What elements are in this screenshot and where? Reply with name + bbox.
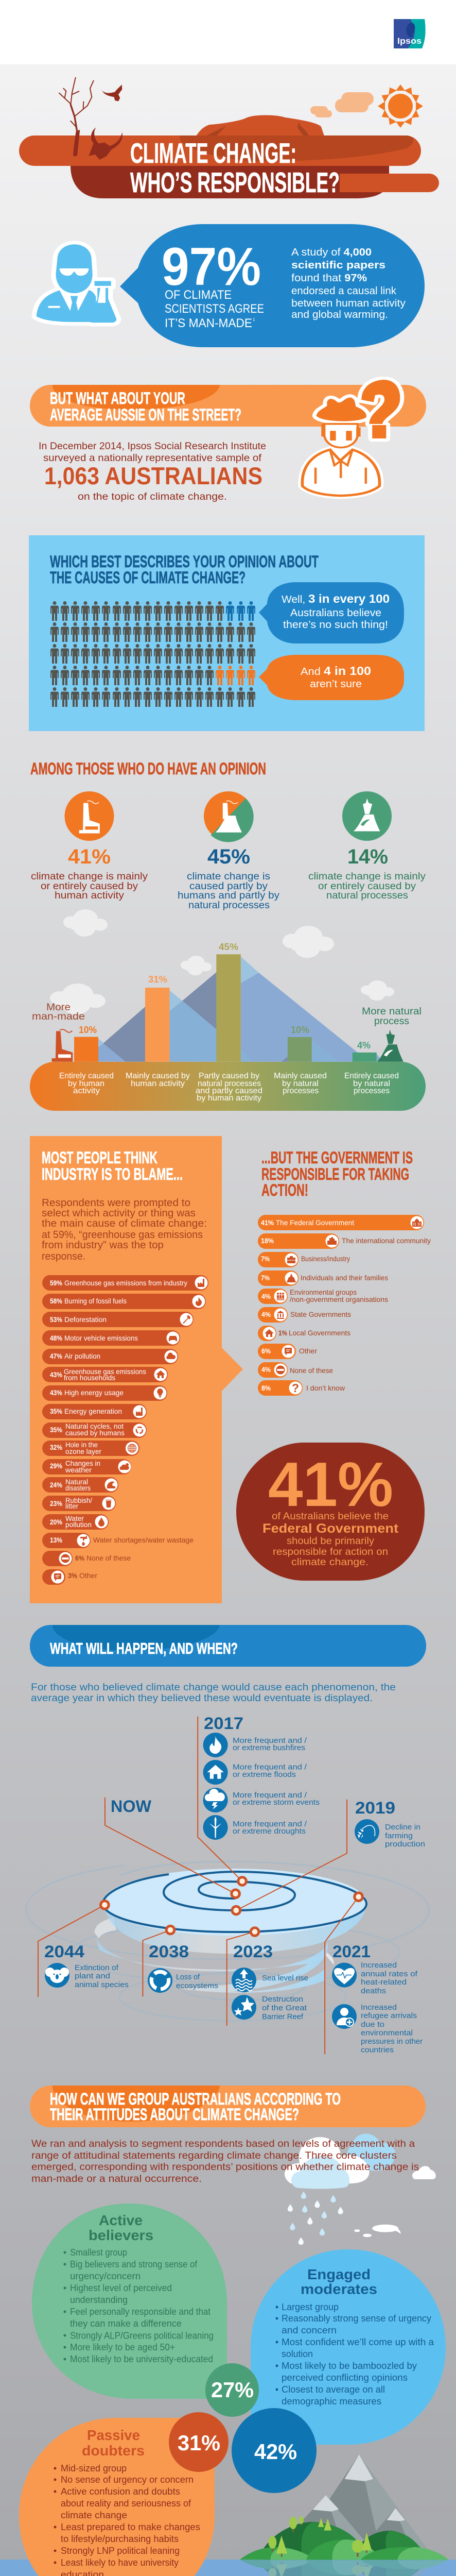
bar list: causes: disasters (65, 1484, 91, 1492)
bar list: who should act: 4% (261, 1310, 271, 1318)
timeline text: or extreme storm events (233, 1798, 320, 1807)
axis band: human activity (131, 1079, 185, 1088)
panel: active believers: Feel personally responsible and that (70, 2307, 211, 2317)
stat: 14% natural processes: climate change is mainly (308, 871, 426, 882)
bar list: who should act: 7% (261, 1255, 270, 1263)
bar list: causes: Motor vehicle emissions (64, 1334, 138, 1342)
bar list: who should act: 1% (278, 1329, 287, 1337)
year labels: NOW (111, 1797, 152, 1816)
panel: passive doubters: about reality and seriousness of (61, 2498, 191, 2509)
stat: 14% natural processes: natural processes (326, 890, 408, 901)
year labels: 2044 (44, 1942, 84, 1961)
body text: the main cause of climate change: (42, 1218, 207, 1229)
bar list: who should act (258, 1215, 431, 1396)
bar list: causes: Natural (65, 1478, 88, 1486)
timeline text: ecosystems (176, 1981, 218, 1990)
bar list: causes: 43% (50, 1370, 62, 1379)
stat: 14% natural processes (308, 791, 426, 901)
heading bar: WHAT WILL HAPPEN, AND WHEN? (50, 1639, 238, 1657)
panel: passive doubters (19, 2418, 215, 2576)
stat: 45% partly human partly natural: climate change is (187, 871, 270, 882)
timeline text: Sea level rise (262, 1974, 308, 1982)
study description: endorsed a causal link (291, 285, 397, 297)
icon: clouds (310, 92, 374, 117)
stat: 27% active believers: 27% (211, 2378, 254, 2402)
panel: government responsible (236, 1148, 431, 1581)
icon: volcano (377, 1029, 404, 1062)
body text: from industry” was the top (42, 1240, 164, 1251)
year labels: 2021 (332, 1942, 371, 1961)
icon circles (45, 1733, 379, 2029)
axis band: Entirely caused (59, 1072, 114, 1080)
logo: Ipsos (394, 19, 426, 48)
timeline text: More frequent and / (233, 1763, 307, 1771)
bar list: causes: 53% (50, 1315, 62, 1324)
bar list: causes: 47% (50, 1352, 62, 1360)
label: more natural process: process (374, 1016, 409, 1027)
heading: AMONG THOSE WHO DO HAVE AN OPINION (30, 759, 266, 778)
callout: 41% federal government: responsible for action on (273, 1547, 388, 1557)
callout: 41% federal government: 41% (268, 1449, 393, 1519)
stat: 31% passive doubters: 31% (178, 2431, 220, 2455)
bar list: who should act: I don’t know (306, 1384, 345, 1392)
survey text: on the topic of climate change. (78, 491, 227, 502)
diagram: ripple disc timeline (26, 1717, 429, 2054)
panel: passive doubters: doubters (82, 2443, 145, 2459)
label: more man-made (32, 1002, 85, 1022)
bar list: causes: Other (79, 1571, 97, 1580)
timeline text: pressures in other (361, 2037, 423, 2046)
heading bar (30, 1625, 426, 1667)
timeline text: animal species (75, 1980, 129, 1989)
bar list: causes: 43% (50, 1388, 62, 1397)
bar list: causes: Rubbish/ (65, 1496, 92, 1504)
intro text: segmentation: man-made or a natural occurrence. (31, 2174, 202, 2184)
bar list: causes: 48% (50, 1334, 62, 1342)
bar list: causes: Air pollution (64, 1352, 100, 1360)
pictogram: 100 people (50, 601, 255, 707)
bar list: causes: Water (65, 1514, 84, 1522)
icon: rain clouds (285, 2134, 436, 2245)
value labels: 45% (219, 942, 238, 952)
bar list: causes: Hole in the (65, 1440, 98, 1449)
panel: attitudes heading (30, 2086, 426, 2127)
logo: Ipsos: Ipsos (397, 36, 422, 46)
bar list: who should act: 4% (261, 1365, 271, 1374)
panel: active believers: More likely to be aged 50+ (70, 2342, 175, 2352)
bar list: who should act: Other (299, 1347, 317, 1355)
bar list: causes: ozone layer (65, 1447, 101, 1455)
heading bar: BUT WHAT ABOUT YOUR (50, 389, 185, 408)
lower dark band (71, 166, 389, 198)
callout: 4 in 100 (259, 655, 404, 700)
bar list: causes: High energy usage (64, 1388, 124, 1397)
heading bar (30, 385, 426, 427)
callout: 4 in 100: aren’t sure (310, 679, 362, 690)
caption: IT’S MAN-MADE (165, 316, 252, 330)
timeline text: deaths (361, 1987, 386, 1995)
panel: passive doubters: Strongly LNP political leaning (61, 2546, 180, 2556)
timeline text: Barrier Reef (262, 2012, 304, 2021)
title banner with outback illustration (19, 78, 439, 198)
panel: active believers: believers (89, 2227, 153, 2243)
timeline text: More frequent and / (233, 1791, 307, 1800)
body text: at 59%, “greenhouse gas emissions (42, 1229, 203, 1241)
value labels: 31% (148, 974, 167, 985)
stat: 41% human activity: or entirely caused by (41, 881, 138, 892)
bar list: causes: None of these (86, 1554, 131, 1562)
timeline text: or extreme droughts (233, 1827, 306, 1836)
label: more man-made: man-made (32, 1011, 85, 1022)
panel: among those with an opinion (30, 759, 426, 911)
stat: 45% partly human partly natural: 45% (207, 845, 250, 868)
callout: 41% federal government: Federal Government (262, 1521, 399, 1536)
year labels: 2038 (149, 1942, 189, 1961)
stat: 41% human activity: 41% (68, 845, 111, 868)
rock (196, 115, 324, 136)
heading: ACTION! (261, 1181, 308, 1199)
callout: 41% federal government: should be primarily (287, 1536, 375, 1547)
title (130, 137, 340, 198)
bar list: who should act: 8% (261, 1384, 271, 1392)
bar list: who should act: The international community (342, 1236, 431, 1245)
leader lines (38, 1717, 359, 2054)
bar list: who should act: Environmental groups (290, 1288, 357, 1296)
timeline text: More frequent and / (233, 1736, 307, 1745)
callout: 3 in every 100: Well, 3 in every 100 (282, 592, 390, 605)
bar list: causes: Energy generation (64, 1407, 122, 1415)
panel: active believers: Highest level of perceived (70, 2283, 172, 2293)
axis band: and partly caused (196, 1087, 262, 1095)
bar list: causes: pollution (65, 1520, 92, 1529)
intro text (31, 1682, 396, 1704)
value labels (79, 942, 371, 1050)
bar list: causes: 6% (75, 1554, 84, 1562)
stat: 14% natural processes: or entirely caused by (318, 881, 416, 892)
timeline text: Extinction of (75, 1963, 119, 1972)
bar list: causes: 20% (50, 1518, 62, 1526)
stat: 42% engaged moderates: 42% (254, 2439, 297, 2464)
panel: engaged moderates: demographic measures (282, 2396, 381, 2406)
timeline text: annual rates of (361, 1970, 418, 1978)
study description: and global warming. (291, 309, 388, 320)
heading: WHICH BEST DESCRIBES YOUR OPINION ABOUT (50, 552, 319, 571)
panel: engaged moderates: Largest group (282, 2302, 339, 2312)
panel: active believers: understanding (70, 2295, 128, 2305)
bar list: who should act: ? (292, 1381, 299, 1395)
panel: engaged moderates: solution (282, 2349, 313, 2359)
panel: passive doubters: Least likely to have university (61, 2557, 179, 2568)
bar list: causes: Deforestation (64, 1315, 107, 1324)
intro text: average year in which they believed these would eventuate is displayed. (31, 1693, 373, 1704)
bar list: causes: 59% (50, 1279, 62, 1287)
caption: 1 (253, 317, 255, 322)
panel: what will happen and when (26, 1625, 429, 2055)
stat: 41% human activity: climate change is mainly (31, 871, 148, 882)
bar list: causes: weather (65, 1466, 92, 1474)
bar list: causes (42, 1275, 208, 1585)
callout: 41% federal government: of Australians believe the (272, 1511, 389, 1522)
callout: 4 in 100: And 4 in 100 (301, 664, 371, 677)
timeline text: or extreme bushfires (233, 1743, 305, 1752)
bar list: causes: Greenhouse gas emissions (64, 1367, 146, 1376)
study description: between human activity (291, 298, 406, 309)
bar list: causes: 13% (50, 1536, 62, 1544)
panel: engaged moderates: perceived conflicting opinions (282, 2372, 408, 2383)
icon: Aussie with question mark (302, 380, 400, 496)
bar list: causes: 35% (50, 1426, 62, 1434)
panel: passive doubters: climate change (61, 2510, 127, 2520)
big number: 97% (162, 237, 261, 297)
bar list: who should act: /non-government organisations (290, 1295, 388, 1303)
axis band: by human activity (197, 1094, 261, 1103)
study description: scientific papers (291, 260, 385, 271)
bar list: who should act: Individuals and their families (301, 1274, 388, 1282)
bar list: causes: 24% (50, 1481, 62, 1489)
mountains (74, 957, 382, 1062)
axis band: natural processes (198, 1079, 261, 1088)
label: more man-made: More (46, 1002, 71, 1013)
panel: active believers: Strongly ALP/Greens political leaning (70, 2331, 214, 2341)
axis band: by natural (353, 1079, 390, 1088)
panel: engaged moderates: Closest to average on all (282, 2384, 385, 2395)
heading (50, 552, 319, 587)
axis band: processes (354, 1087, 390, 1095)
water at the bottom of the page (0, 2560, 456, 2576)
icons: phenomena (45, 1736, 375, 2026)
markers (101, 1877, 362, 1936)
year labels: 2019 (355, 1799, 395, 1817)
stat: 41% human activity: human activity (55, 890, 125, 901)
year labels: 2023 (233, 1942, 273, 1961)
callout: 97% of climate scientists (120, 224, 425, 347)
heading: MOST PEOPLE THINK (42, 1148, 157, 1167)
bar list: who should act: 41% (261, 1218, 274, 1227)
bar list: causes: 3% (68, 1571, 77, 1580)
panel: active believers: Big believers and strong sense of (70, 2259, 198, 2269)
panel: engaged moderates: Most confident we’ll come up with a (282, 2337, 434, 2347)
intro text: segmentation: emerged, corresponding with respondents’ positions on whether climate change is (31, 2162, 419, 2173)
year labels: 2017 (204, 1714, 243, 1733)
timeline text: due to (361, 2020, 384, 2029)
panel: engaged moderates: Most likely to be bamboozled by (282, 2361, 417, 2371)
panel: active believers: Smallest group (70, 2247, 127, 2258)
callout: 41% federal government (236, 1443, 425, 1581)
timeline text: production (385, 1840, 425, 1849)
panel: active believers: urgency/concern (70, 2271, 141, 2281)
label: more natural process: More natural (362, 1006, 422, 1017)
panel: passive doubters: to lifestyle/purchasing habits (61, 2534, 179, 2544)
timeline text: plant and (75, 1972, 110, 1980)
value labels: 4% (357, 1040, 371, 1050)
survey text: 1,063 AUSTRALIANS (44, 462, 262, 489)
bar list: who should act: Local Governments (289, 1329, 350, 1337)
timeline text: or extreme floods (233, 1770, 296, 1779)
intro text: For those who believed climate change would cause each phenomenon, the (31, 1682, 396, 1693)
axis band: Entirely caused (344, 1072, 399, 1080)
bar list: who should act: 6% (261, 1347, 271, 1355)
bar list: causes: 58% (50, 1297, 62, 1305)
panel: active believers: they can make a difference (70, 2318, 182, 2329)
panel: active believers: Most likely to be university-educated (70, 2354, 213, 2364)
panel: passive doubters: Least prepared to make changes (61, 2522, 200, 2532)
value labels: 10% (291, 1025, 309, 1035)
body text (42, 1197, 207, 1262)
icon: sun (378, 84, 423, 128)
icon: mountains and reflection (240, 2454, 448, 2576)
caption: SCIENTISTS AGREE (165, 302, 264, 316)
caption: OF CLIMATE (165, 288, 232, 302)
intro text: segmentation: We ran and analysis to segment respondents based on levels of agreement with a (31, 2139, 415, 2149)
icon: factory (52, 1029, 73, 1062)
panel: engaged moderates (251, 2249, 446, 2445)
upper bar (19, 135, 421, 166)
value labels: 10% (79, 1025, 97, 1035)
bar list: causes: Burning of fossil fuels (64, 1297, 127, 1305)
bar list: causes: 35% (50, 1407, 62, 1415)
bar list: who should act: State Governments (290, 1310, 351, 1318)
bar list: who should act: 7% (261, 1274, 270, 1282)
stat: 14% natural processes: 14% (347, 845, 388, 868)
timeline text: Increased (361, 2003, 397, 2012)
bar list: who should act: None of these (290, 1366, 333, 1375)
timeline text: farming (385, 1832, 413, 1840)
callout: 41% federal government: climate change. (291, 1557, 369, 1568)
callout: 3 in every 100 (259, 582, 404, 643)
study description (291, 247, 406, 320)
stat: 45% partly human partly natural: caused partly by (189, 881, 268, 892)
bars (74, 954, 377, 1062)
title: CLIMATE CHANGE: (130, 137, 296, 169)
bar list: causes: 29% (50, 1462, 62, 1470)
survey text: In December 2014, Ipsos Social Research Institute (39, 440, 266, 452)
axis band: by natural (282, 1079, 319, 1088)
icon: scientist with flask (37, 244, 116, 323)
axis band: by human (68, 1079, 104, 1088)
timeline text: Decline in (385, 1823, 420, 1832)
stat: 45% partly human partly natural: humans and partly by (178, 890, 280, 901)
survey text (39, 440, 266, 502)
bar list: causes: litter (65, 1502, 78, 1510)
timeline text (75, 1736, 425, 2055)
bar list: who should act: Business/industry (301, 1255, 350, 1263)
axis band (30, 1062, 426, 1111)
bar list: who should act: 18% (261, 1236, 274, 1245)
label: more natural process (362, 1006, 422, 1027)
bar list: causes: caused by humans (65, 1429, 125, 1437)
stat: 27% active believers (205, 2363, 259, 2417)
bar list: causes: Greenhouse gas emissions from industry (64, 1279, 187, 1287)
panel: engaged moderates: Engaged (307, 2266, 371, 2282)
icon: dead tree, bird and skull (59, 78, 122, 160)
panel: passive doubters: No sense of urgency or concern (61, 2475, 194, 2485)
intro text: segmentation (31, 2139, 419, 2184)
body text: select which activity or thing was (42, 1208, 196, 1219)
clouds behind the bar chart (50, 909, 394, 1014)
axis band: Mainly caused by (126, 1072, 190, 1080)
timeline text: Destruction (262, 1995, 303, 2004)
heading bar: AVERAGE AUSSIE ON THE STREET? (50, 405, 241, 424)
heading: THE CAUSES OF CLIMATE CHANGE? (50, 568, 245, 587)
stat: 45% partly human partly natural (178, 791, 280, 911)
heading (42, 1148, 183, 1183)
panel: average Aussie (30, 380, 426, 502)
axis band: processes (283, 1087, 319, 1095)
axis band: Mainly caused (274, 1072, 327, 1080)
panel: engaged moderates: Reasonably strong sense of urgency (282, 2313, 431, 2324)
bar list: causes: Water shortages/water wastage (93, 1536, 194, 1544)
panel: active believers: Active (99, 2212, 143, 2228)
bar list: causes: from households (64, 1374, 115, 1382)
axis band: activity (73, 1087, 100, 1095)
panel: passive doubters: Active confusion and doubts (61, 2486, 180, 2497)
timeline text: refugee arrivals (361, 2011, 417, 2020)
stat: 42% engaged moderates (232, 2408, 317, 2493)
timeline text: of the Great (262, 2004, 307, 2012)
study description: found that 97% (291, 273, 367, 284)
panel: opinion about causes (29, 535, 425, 731)
body text: response. (42, 1251, 85, 1262)
timeline text: Increased (361, 1961, 397, 1970)
bar list: causes: 32% (50, 1443, 62, 1451)
stat: 45% partly human partly natural: natural processes (188, 900, 270, 911)
stat: 31% passive doubters (169, 2412, 229, 2472)
caption (165, 288, 264, 330)
title: WHO’S RESPONSIBLE? (130, 166, 340, 198)
panel: engaged moderates: and concern (282, 2325, 337, 2335)
timeline text: environmental (361, 2029, 413, 2037)
panel: passive doubters: Mid-sized group (61, 2463, 127, 2473)
bar list: causes: Changes in (65, 1459, 100, 1467)
body text: Respondents were prompted to (42, 1197, 190, 1209)
bar list: who should act: 4% (261, 1292, 271, 1300)
panel: active believers (32, 2204, 227, 2399)
study description: A study of 4,000 (291, 247, 372, 258)
year labels (44, 1714, 395, 1961)
heading (261, 1148, 413, 1199)
timeline text: Loss of (176, 1973, 200, 1981)
bar list: who should act: The Federal Government (276, 1218, 354, 1227)
panel: engaged moderates: moderates (301, 2281, 377, 2297)
panel: passive doubters: Passive (87, 2427, 140, 2443)
intro text: segmentation: range of attitudinal statements regarding climate change. Three core clusters (31, 2150, 397, 2161)
timeline text: heat-related (361, 1978, 407, 1987)
bar list: causes: 23% (50, 1499, 62, 1507)
callout: 3 in every 100: Australians believe (290, 607, 381, 619)
panel: industry to blame (30, 1136, 243, 1603)
lower bar (340, 174, 439, 192)
callout: 3 in every 100: there’s no such thing! (283, 619, 388, 631)
timeline text: More frequent and / (233, 1820, 307, 1828)
axis band: Partly caused by (199, 1072, 259, 1080)
timeline text: countries (361, 2045, 394, 2055)
stat: 41% human activity (31, 791, 148, 901)
bar list: causes: Natural cycles, not (65, 1422, 124, 1430)
heading: INDUSTRY IS TO BLAME... (42, 1165, 183, 1183)
survey text: surveyed a nationally representative sample of (43, 452, 262, 464)
bar chart: range of opinion (30, 942, 426, 1111)
panel: attitudes heading: THEIR ATTITUDES ABOUT CLIMATE CHANGE? (50, 2105, 299, 2124)
